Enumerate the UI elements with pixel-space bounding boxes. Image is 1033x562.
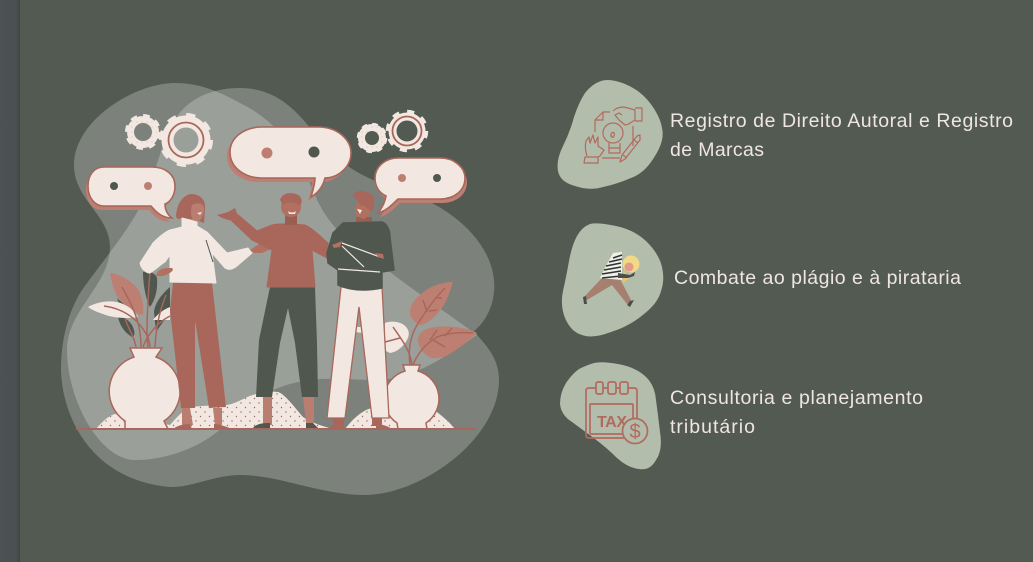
person: man centre [217,193,328,428]
icon: tax calendar: TAX [597,414,627,431]
background blob upper [67,83,477,460]
background blob large [61,88,499,495]
left edge strip [0,0,20,562]
gear small left [127,116,159,148]
text: registration: Registro de Direito Autoral e Registro [670,110,1013,132]
text: tax: tributário [670,416,755,438]
speech bubble right [375,158,467,217]
gear large right [388,112,426,150]
gear large left [162,116,210,164]
speech bubble left [86,167,175,222]
blob background 3 [560,362,661,469]
icon: idea with hands [584,107,642,163]
icon: tax calendar: $ [629,421,641,443]
right vase [384,365,439,429]
person: woman [140,194,273,429]
dotted ground mounds [96,392,455,429]
text: tax [670,387,923,438]
ground line [76,428,476,430]
icon: tax calendar [586,382,648,444]
blob background 1 [558,80,663,189]
text: plagiarism: Combate ao plágio e à pirataria [674,267,961,289]
blob background 2 [562,223,663,336]
left plant [88,271,170,347]
text: registration: de Marcas [670,139,764,161]
person: man right [327,191,394,429]
item 1: copyright and trademark [558,80,1013,189]
text: registration [670,110,1013,161]
item 3: tax consulting [560,362,923,469]
left vase [109,348,180,429]
item 2: plagiarism and piracy [562,223,961,336]
speech bubble centre [227,127,351,201]
gear small right [358,124,386,152]
right plant [356,282,477,365]
illustration: team talking [61,83,499,495]
text: tax: Consultoria e planejamento [670,387,923,409]
icon: thief with light bulb [583,252,640,307]
